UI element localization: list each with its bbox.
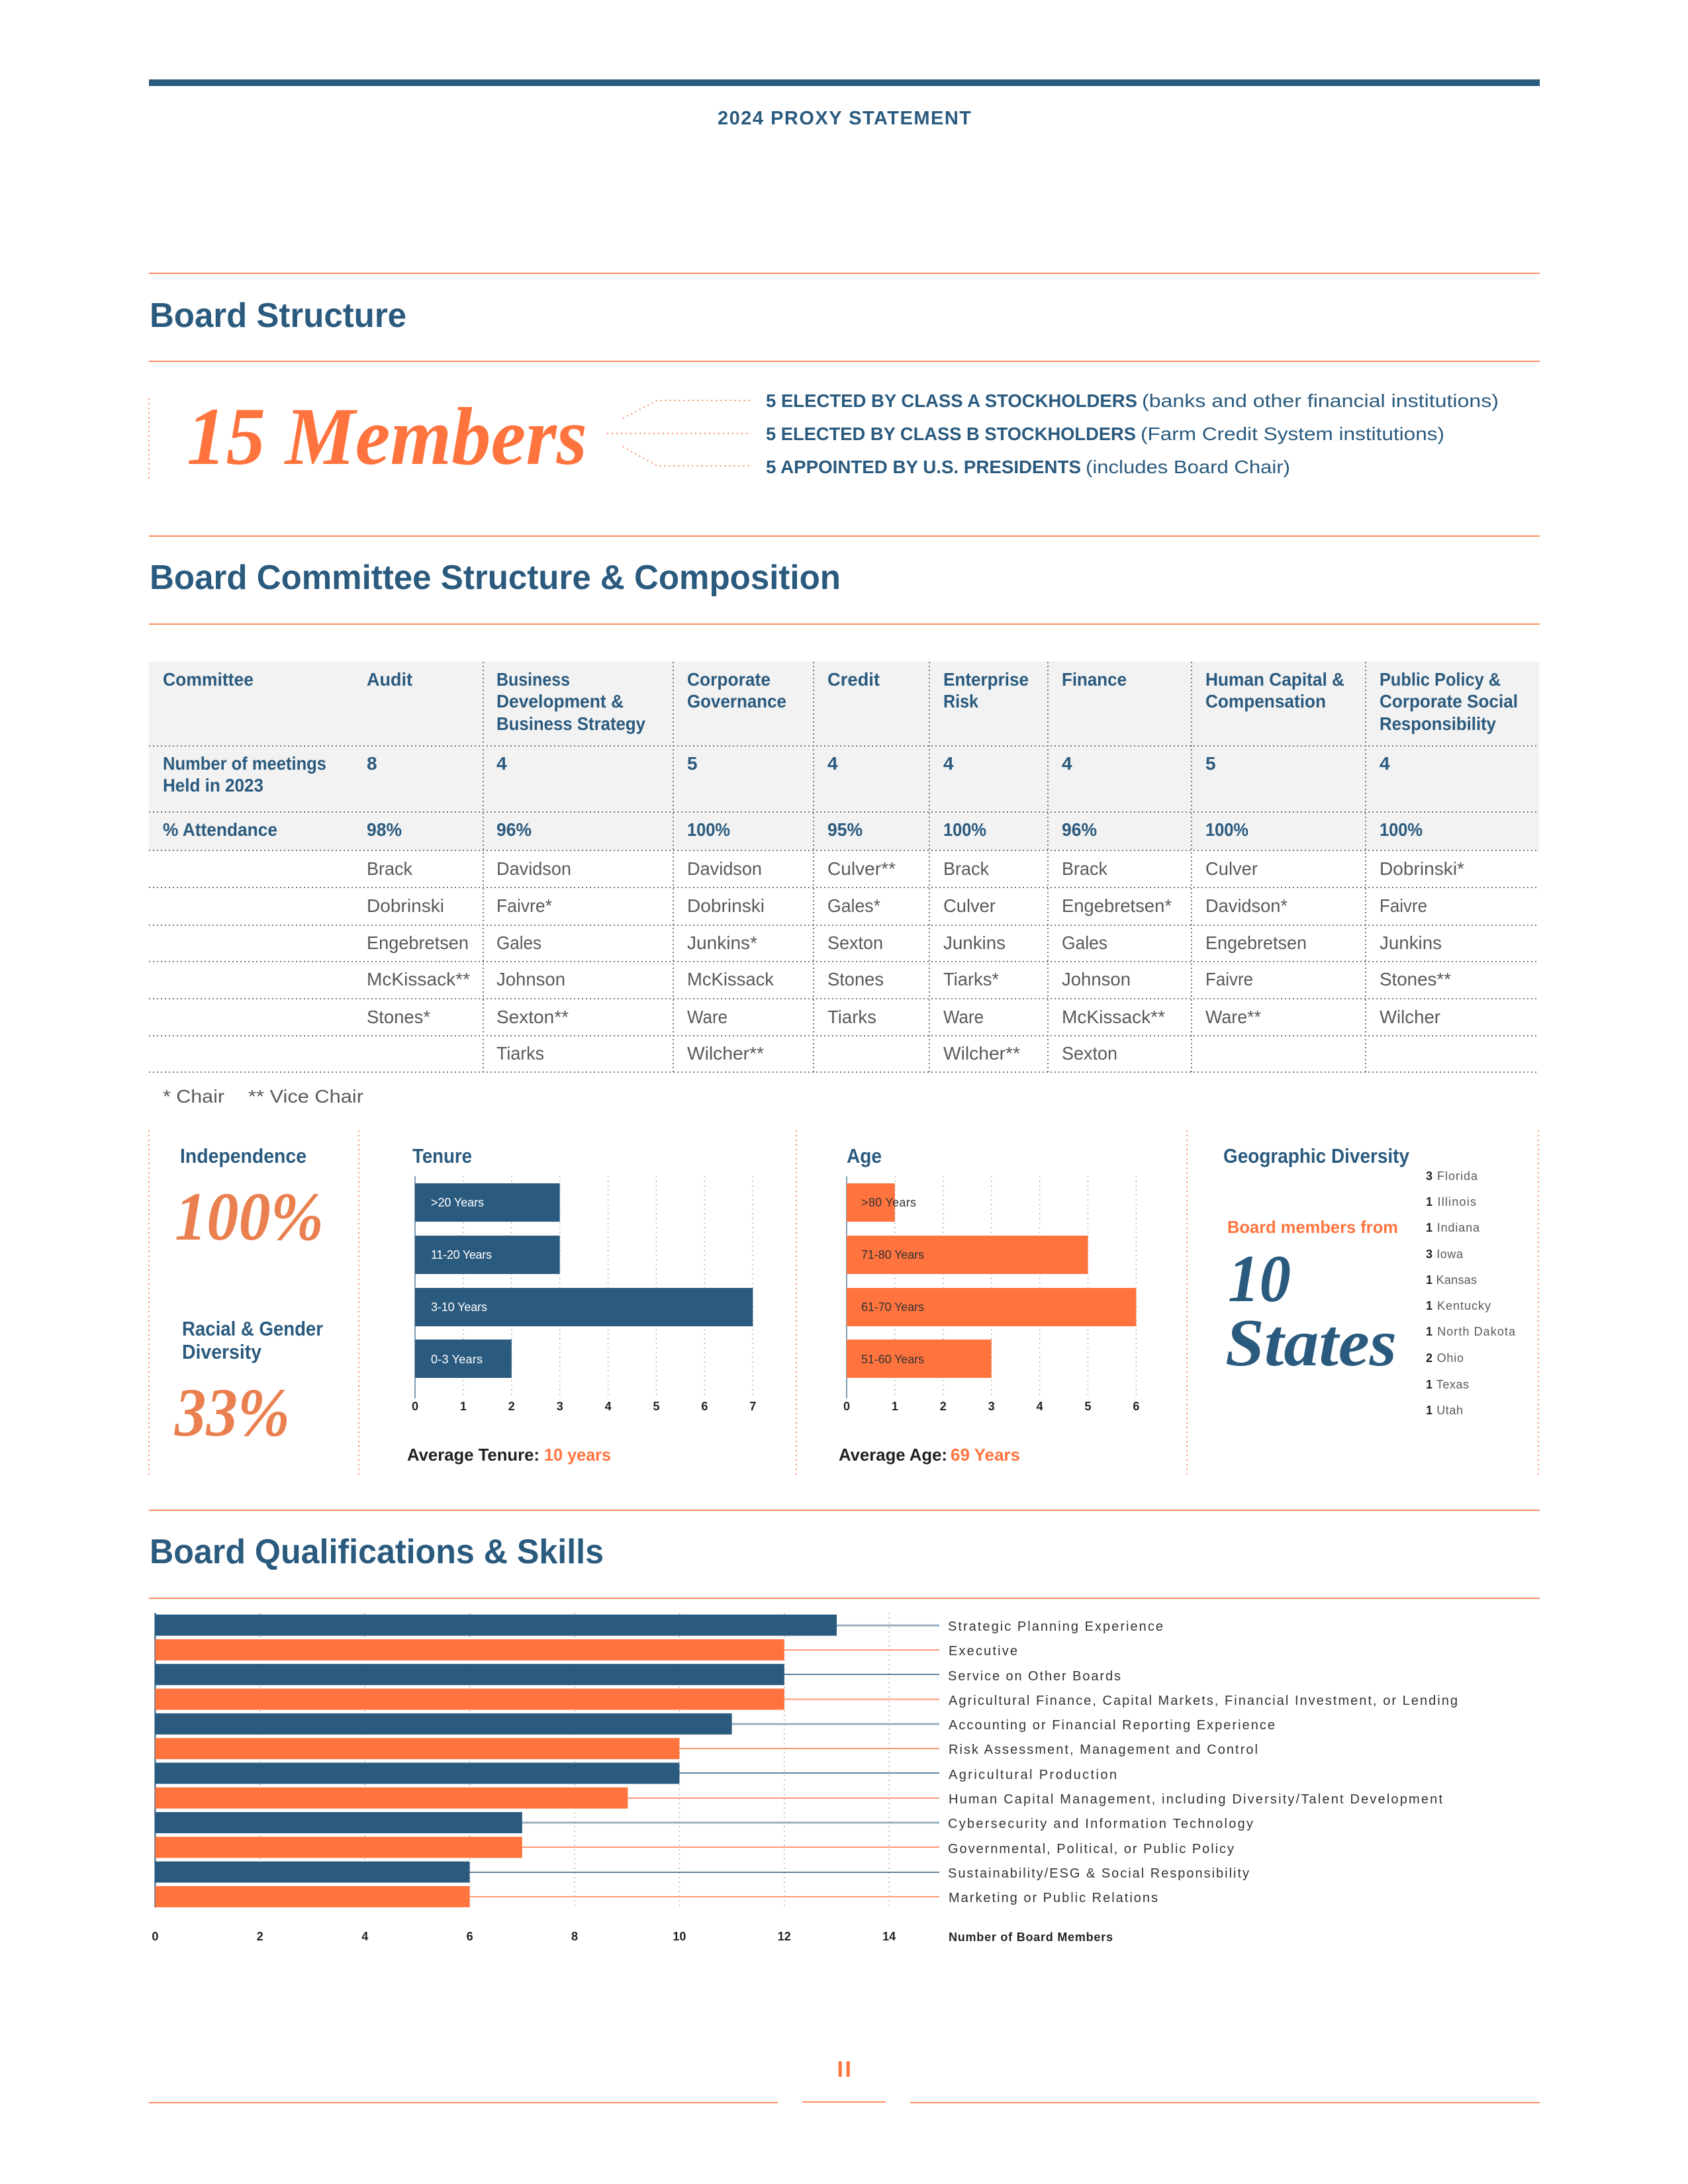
column: Business Development & Business Strategy: Tiarks xyxy=(496,1043,544,1064)
bar chart: age: 0 xyxy=(843,1400,850,1413)
axis tick labels: 14 xyxy=(882,1930,896,1943)
bar chart: tenure: 3 xyxy=(557,1400,563,1413)
column: Audit: McKissack** xyxy=(367,969,470,989)
heading: Racial & Gender Diversity: Diversity xyxy=(182,1340,262,1363)
column: Credit: Credit xyxy=(827,669,880,690)
heading: Tenure: Tenure xyxy=(412,1144,472,1167)
column: Business Development & Business Strategy: Faivre* xyxy=(496,895,552,916)
column: Human Capital & Compensation: Faivre xyxy=(1205,969,1253,989)
column: Enterprise Risk: Enterprise xyxy=(943,669,1029,690)
column: Corporate Governance: 100% xyxy=(687,819,730,840)
column: Human Capital & Compensation: Compensation xyxy=(1205,691,1326,711)
column: Human Capital & Compensation: 100% xyxy=(1205,819,1248,840)
column: Credit: Sexton xyxy=(827,933,883,953)
column: Credit: Stones xyxy=(827,969,884,989)
state list: 1 Texas xyxy=(1426,1378,1469,1391)
bar chart: age: 4 xyxy=(1037,1400,1043,1413)
member breakdown list: 5 APPOINTED BY U.S. PRESIDENTS xyxy=(766,457,1081,477)
column: Enterprise Risk: Tiarks* xyxy=(943,969,999,989)
member breakdown list: (Farm Credit System institutions) xyxy=(1141,424,1444,444)
column: Business Development & Business Strategy: 96% xyxy=(496,819,532,840)
column: Corporate Governance: Wilcher** xyxy=(687,1043,764,1064)
row labels: % Attendance xyxy=(163,819,277,840)
column: Business Development & Business Strategy: Johnson xyxy=(496,969,565,989)
stat: 100%: 100% xyxy=(175,1179,324,1255)
column: Public Policy & Corporate Social Responsibility: 4 xyxy=(1380,753,1390,774)
column: Audit xyxy=(367,669,470,1027)
axis tick labels: 6 xyxy=(467,1930,473,1943)
heading: Independence: Independence xyxy=(180,1144,306,1167)
heading: Board Qualifications & Skills: Board Qualifications & Skills xyxy=(150,1533,604,1571)
big number: 15 Members: 15 Members xyxy=(187,391,587,482)
state list xyxy=(1426,1169,1516,1417)
bar chart: age: 1 xyxy=(892,1400,898,1413)
column: Public Policy & Corporate Social Responsibility: 100% xyxy=(1380,819,1423,840)
axis tick labels: 12 xyxy=(778,1930,791,1943)
column: Enterprise Risk: Brack xyxy=(943,858,990,879)
column: Human Capital & Compensation: Culver xyxy=(1205,858,1258,879)
committee table xyxy=(149,662,1539,1072)
panel: 15 members xyxy=(149,390,1499,482)
bar chart: age: 71-80 Years xyxy=(861,1248,924,1261)
column: Human Capital & Compensation: Engebretsen xyxy=(1205,933,1307,953)
column: Enterprise Risk: Culver xyxy=(943,895,996,916)
bar chart: tenure: 0-3 Years xyxy=(431,1353,483,1366)
column: Business Development & Business Strategy: Development & xyxy=(496,691,624,711)
average tenure xyxy=(407,1445,611,1465)
skill labels xyxy=(948,1619,1458,1905)
column: Business Development & Business Strategy: Gales xyxy=(496,933,541,953)
column: Public Policy & Corporate Social Responsibility: Responsibility xyxy=(1380,713,1496,734)
column: Audit: Audit xyxy=(367,669,412,690)
column: Human Capital & Compensation: Ware** xyxy=(1205,1007,1261,1027)
column: Enterprise Risk: 4 xyxy=(943,753,954,774)
column: Finance: 96% xyxy=(1062,819,1097,840)
bar chart: age: 2 xyxy=(940,1400,947,1413)
bar chart: age: 5 xyxy=(1084,1400,1092,1413)
column: Finance: 4 xyxy=(1062,753,1072,774)
column: Public Policy & Corporate Social Responsibility: Junkins xyxy=(1380,933,1442,953)
skill labels: Risk Assessment, Management and Control xyxy=(949,1743,1258,1757)
column: Human Capital & Compensation xyxy=(1205,669,1344,1027)
state list: 2 Ohio xyxy=(1426,1351,1464,1365)
column: Public Policy & Corporate Social Responsibility: Corporate Social xyxy=(1380,691,1518,711)
footer page number: II xyxy=(837,2057,853,2082)
bar chart: age: 61-70 Years xyxy=(861,1300,924,1314)
column: Enterprise Risk: Risk xyxy=(943,691,978,711)
skill labels: Service on Other Boards xyxy=(948,1669,1121,1684)
column: Corporate Governance: Davidson xyxy=(687,858,762,879)
callout: board members from: Board members from xyxy=(1227,1217,1398,1237)
state list: 1 Indiana xyxy=(1426,1221,1480,1234)
heading: Racial & Gender Diversity: Racial & Gender xyxy=(182,1317,323,1340)
bar chart: tenure: 2 xyxy=(508,1400,515,1413)
average age: Average Age: xyxy=(839,1445,947,1465)
column: Finance: McKissack** xyxy=(1062,1007,1165,1027)
skill labels: Executive xyxy=(949,1644,1017,1659)
column: Business Development & Business Strategy: Business xyxy=(496,669,570,690)
member breakdown list: 5 ELECTED BY CLASS A STOCKHOLDERS xyxy=(766,390,1137,411)
bars xyxy=(155,1615,837,1907)
state list: 1 Utah xyxy=(1426,1404,1463,1417)
column: Corporate Governance: Ware xyxy=(687,1007,727,1027)
average age: 69 Years xyxy=(951,1445,1020,1465)
stat: 10 States xyxy=(1225,1242,1397,1381)
stat: 10 States: 10 xyxy=(1228,1242,1291,1316)
table footnote xyxy=(163,1086,363,1107)
column: Credit: Culver** xyxy=(827,858,896,879)
column: Audit: 98% xyxy=(367,819,402,840)
state list: 1 Illinois xyxy=(1426,1195,1476,1208)
column: Credit: 4 xyxy=(827,753,838,774)
column: Finance: Gales xyxy=(1062,933,1107,953)
column: Credit: Tiarks xyxy=(827,1007,876,1027)
axis tick labels: 2 xyxy=(257,1930,263,1943)
skill labels: Accounting or Financial Reporting Experience xyxy=(949,1718,1275,1733)
member breakdown list: 5 ELECTED BY CLASS B STOCKHOLDERS xyxy=(766,424,1136,444)
bar chart: tenure: 5 xyxy=(653,1400,660,1413)
column: Human Capital & Compensation: 5 xyxy=(1205,753,1216,774)
state list: 1 Kentucky xyxy=(1426,1299,1491,1312)
bar chart: tenure: 7 xyxy=(749,1400,756,1413)
column: Finance: Johnson xyxy=(1062,969,1131,989)
column: Finance xyxy=(1062,669,1172,1064)
row labels: Committee xyxy=(163,669,254,690)
column: Enterprise Risk: Junkins xyxy=(943,933,1006,953)
heading: Age: Age xyxy=(847,1144,882,1167)
column: Audit: Dobrinski xyxy=(367,895,444,916)
column: Corporate Governance: Governance xyxy=(687,691,786,711)
axis tick labels xyxy=(152,1930,896,1943)
column: Public Policy & Corporate Social Responsibility: Dobrinski* xyxy=(1380,858,1464,879)
skill labels: Agricultural Finance, Capital Markets, Financial Investment, or Lending xyxy=(949,1694,1458,1708)
column: Corporate Governance xyxy=(687,669,786,1064)
stat: 10 States: States xyxy=(1225,1306,1397,1381)
heading: Racial & Gender Diversity xyxy=(182,1317,323,1363)
column: Human Capital & Compensation: Human Capital & xyxy=(1205,669,1344,690)
column: Enterprise Risk: 100% xyxy=(943,819,986,840)
column: Credit: Gales* xyxy=(827,895,880,916)
skill labels: Agricultural Production xyxy=(949,1768,1117,1782)
bar chart: tenure: 4 xyxy=(605,1400,612,1413)
average age xyxy=(839,1445,1020,1465)
skill labels: Sustainability/ESG & Social Responsibility xyxy=(948,1866,1249,1881)
state list: 3 Iowa xyxy=(1426,1248,1464,1261)
column: Corporate Governance: McKissack xyxy=(687,969,774,989)
table footnote: ** Vice Chair xyxy=(248,1086,363,1107)
bar chart: tenure: 6 xyxy=(701,1400,708,1413)
skill labels: Human Capital Management, including Diversity/Talent Development xyxy=(949,1792,1442,1807)
row labels: Held in 2023 xyxy=(163,775,263,796)
column: Human Capital & Compensation: Davidson* xyxy=(1205,895,1288,916)
skill labels: Cybersecurity and Information Technology xyxy=(948,1817,1253,1831)
column: Enterprise Risk: Ware xyxy=(943,1007,984,1027)
panel: geographic diversity xyxy=(1223,1144,1516,1417)
member breakdown list xyxy=(766,390,1499,477)
column: Finance: Sexton xyxy=(1062,1043,1117,1064)
column: Audit: Stones* xyxy=(367,1007,430,1027)
bar chart: tenure: 11-20 Years xyxy=(431,1248,492,1261)
axis tick labels: 4 xyxy=(361,1930,368,1943)
stat: 33%: 33% xyxy=(174,1375,290,1451)
skill labels: Strategic Planning Experience xyxy=(948,1619,1163,1634)
bar chart: age: >80 Years xyxy=(861,1196,916,1209)
average tenure: Average Tenure: xyxy=(407,1445,539,1465)
axis tick labels: 0 xyxy=(152,1930,158,1943)
bar chart: tenure: >20 Years xyxy=(431,1196,484,1209)
column: Finance: Engebretsen* xyxy=(1062,895,1172,916)
heading: Geographic Diversity: Geographic Diversity xyxy=(1223,1144,1410,1167)
column: Business Development & Business Strategy: 4 xyxy=(496,753,507,774)
column: Corporate Governance: Dobrinski xyxy=(687,895,765,916)
column: Corporate Governance: Corporate xyxy=(687,669,771,690)
member breakdown list: (banks and other financial institutions) xyxy=(1142,390,1499,411)
column: Business Development & Business Strategy: Davidson xyxy=(496,858,571,879)
column: Enterprise Risk xyxy=(943,669,1029,1064)
column: Finance: Brack xyxy=(1062,858,1108,879)
panel: independence and diversity xyxy=(174,1144,324,1451)
bar chart: tenure: 1 xyxy=(460,1400,467,1413)
axis tick labels: 10 xyxy=(673,1930,686,1943)
bar chart: tenure: 3-10 Years xyxy=(431,1300,487,1314)
axis title: Number of Board Members xyxy=(949,1931,1113,1944)
row labels xyxy=(163,669,326,840)
table footnote: * Chair xyxy=(163,1086,224,1107)
header bar xyxy=(149,79,1540,86)
axis tick labels: 8 xyxy=(571,1930,578,1943)
bar chart: tenure: 0 xyxy=(412,1400,418,1413)
column: Audit: Brack xyxy=(367,858,413,879)
column: Enterprise Risk: Wilcher** xyxy=(943,1043,1020,1064)
column: Business Development & Business Strategy xyxy=(496,669,645,1064)
column: Public Policy & Corporate Social Responsibility xyxy=(1380,669,1518,1027)
column: Business Development & Business Strategy: Business Strategy xyxy=(496,713,645,734)
average tenure: 10 years xyxy=(544,1445,611,1465)
bar chart: qualifications and skills xyxy=(152,1613,1458,1944)
column: Audit: Engebretsen xyxy=(367,933,469,953)
state list: 3 Florida xyxy=(1426,1169,1478,1183)
leader lines xyxy=(470,1625,939,1897)
column: Corporate Governance: Junkins* xyxy=(687,933,757,953)
panel: age xyxy=(839,1144,1139,1465)
bar chart: age: 3 xyxy=(988,1400,995,1413)
column: Credit xyxy=(827,669,896,1027)
panel: tenure xyxy=(407,1144,756,1465)
column: Finance: Finance xyxy=(1062,669,1127,690)
column: Public Policy & Corporate Social Responsibility: Wilcher xyxy=(1380,1007,1440,1027)
bar chart: tenure xyxy=(412,1176,756,1413)
column: Public Policy & Corporate Social Responsibility: Stones** xyxy=(1380,969,1451,989)
state list: 1 North Dakota xyxy=(1426,1325,1516,1338)
column: Public Policy & Corporate Social Responsibility: Public Policy & xyxy=(1380,669,1501,690)
state list: 1 Kansas xyxy=(1426,1273,1477,1287)
heading: Board Structure: Board Structure xyxy=(150,296,406,335)
header title: 2024 PROXY STATEMENT xyxy=(718,108,971,129)
bar chart: age: 6 xyxy=(1133,1400,1139,1413)
connector lines xyxy=(607,400,750,466)
member breakdown list: (includes Board Chair) xyxy=(1086,457,1290,477)
row labels: Number of meetings xyxy=(163,753,326,774)
skill labels: Marketing or Public Relations xyxy=(949,1891,1158,1905)
skill labels: Governmental, Political, or Public Policy xyxy=(948,1842,1234,1856)
bar chart: age: 51-60 Years xyxy=(861,1353,924,1366)
column: Credit: 95% xyxy=(827,819,863,840)
column: Audit: 8 xyxy=(367,753,377,774)
column: Business Development & Business Strategy: Sexton** xyxy=(496,1007,569,1027)
bar chart: age xyxy=(843,1176,1139,1413)
heading: Board Committee Structure & Composition: Board Committee Structure & Composition xyxy=(150,559,841,597)
column: Public Policy & Corporate Social Responsibility: Faivre xyxy=(1380,895,1427,916)
column: Corporate Governance: 5 xyxy=(687,753,698,774)
